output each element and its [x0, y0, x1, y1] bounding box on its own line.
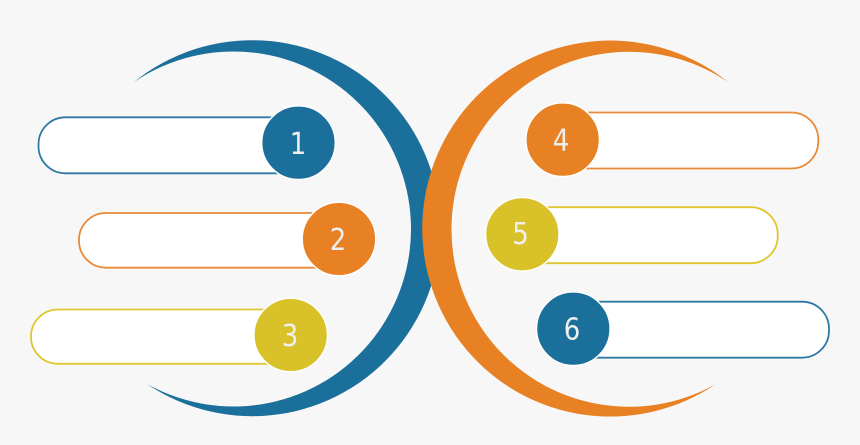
- number 4: 4: [553, 124, 569, 158]
- badge 6: [536, 292, 610, 366]
- orange crescent: [422, 41, 728, 417]
- blue crescent: [134, 40, 440, 416]
- number 1: 1: [290, 127, 306, 162]
- badge 4: [526, 103, 600, 176]
- item 5: [486, 198, 778, 271]
- pill 6: [563, 302, 829, 358]
- badge 3: [254, 298, 328, 372]
- pill 4: [553, 112, 818, 168]
- number 2: 2: [330, 223, 346, 258]
- item 4: [526, 103, 818, 176]
- item 1: [38, 106, 335, 180]
- number 6: 6: [564, 312, 580, 348]
- item 2: [79, 202, 376, 276]
- item 3: [31, 298, 328, 372]
- number 5: 5: [512, 217, 529, 252]
- pill 5: [512, 207, 778, 263]
- pill 2: [79, 213, 349, 268]
- badge 5: [486, 198, 559, 271]
- badge 2: [302, 202, 376, 276]
- number 3: 3: [282, 319, 298, 354]
- pill 3: [31, 310, 301, 364]
- pill 1: [38, 117, 308, 173]
- badge 1: [262, 106, 335, 180]
- item 6: [536, 292, 829, 366]
